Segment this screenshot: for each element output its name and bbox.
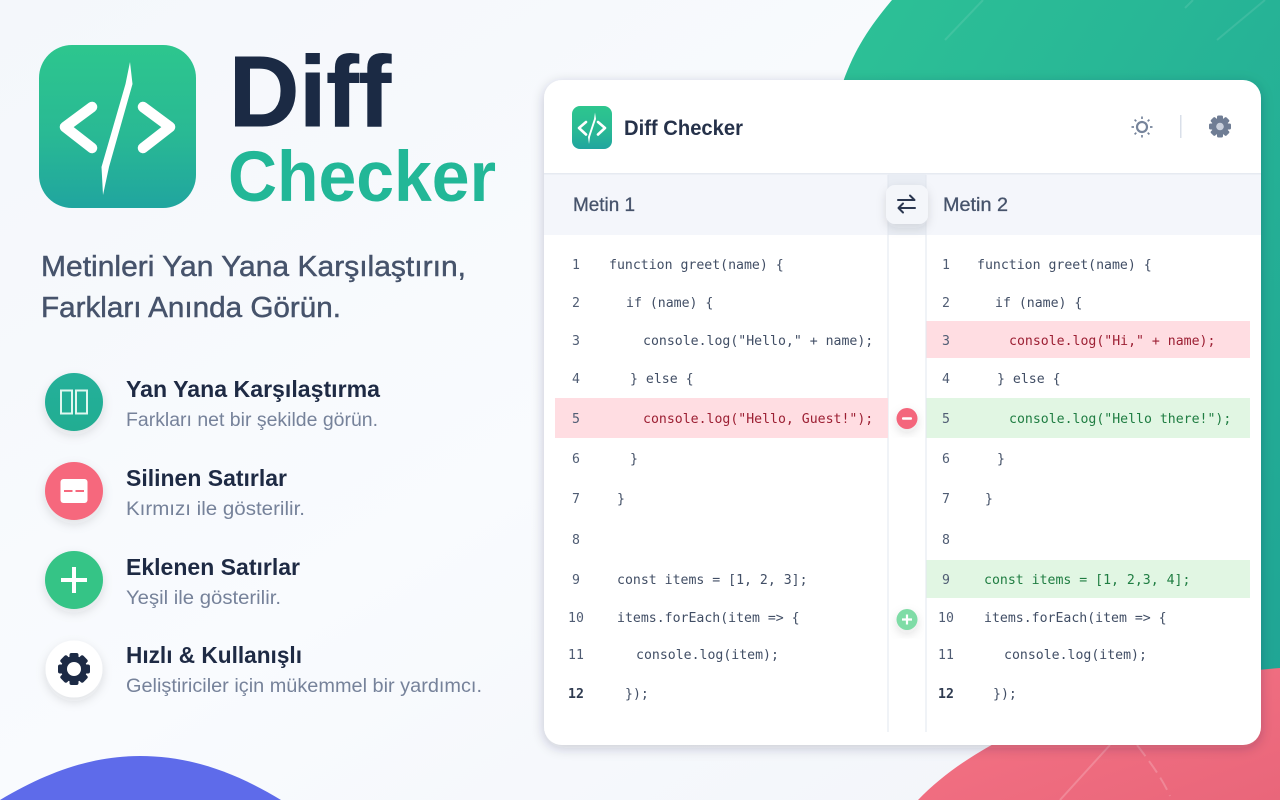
- icon: minus box: [45, 462, 103, 520]
- code: left column: 2: [572, 296, 580, 311]
- code: right column: const items = [1, 2,3, 4];: [984, 573, 1190, 588]
- feature description: Kırmızı ile gösterilir.: [126, 499, 305, 520]
- code: left column: console.log("Hello, Guest!");: [643, 412, 873, 427]
- divider: [1180, 115, 1182, 138]
- code: right column: items.forEach(item => {: [984, 611, 1167, 626]
- icon: plus: [45, 551, 103, 609]
- code: right column: }: [997, 452, 1005, 467]
- column header bar: [544, 173, 1261, 235]
- code: right column: 9: [942, 573, 950, 588]
- icon: app logo: [39, 45, 196, 208]
- background shape: green blob: [843, 0, 1280, 690]
- icon: settings gear: [1209, 116, 1231, 138]
- icon: sun: [1132, 116, 1152, 138]
- code: left column: 6: [572, 452, 580, 467]
- code: left column: 7: [572, 492, 580, 507]
- button: swap: [886, 185, 928, 224]
- code: left column: console.log("Hello," + name);: [643, 334, 873, 349]
- background shape: red blob: [918, 668, 1280, 800]
- badge: added: [896, 609, 918, 630]
- tagline: Metinleri Yan Yana Karşılaştırın,: [41, 251, 466, 283]
- code: right column: 8: [942, 533, 950, 548]
- title: Checker: Checker: [228, 138, 496, 217]
- code: right column: console.log("Hi," + name);: [1009, 334, 1215, 349]
- code: left column: }: [630, 452, 638, 467]
- code: right column: if (name) {: [995, 296, 1082, 311]
- code: right column: } else {: [997, 372, 1061, 387]
- feature: side by side: [45, 373, 380, 431]
- feature title: Eklenen Satırlar: [126, 554, 300, 580]
- feature: fast and handy: [46, 640, 482, 698]
- code: right column: }: [985, 492, 993, 507]
- code: left column: 12: [568, 687, 584, 702]
- icon: small logo: [572, 106, 612, 149]
- tagline: [41, 251, 466, 324]
- code: right column: 3: [942, 334, 950, 349]
- code: left column: const items = [1, 2, 3];: [617, 573, 808, 588]
- code: right column: 4: [942, 372, 950, 387]
- code: left column: 4: [572, 372, 580, 387]
- code: left column: items.forEach(item => {: [617, 611, 800, 626]
- feature description: Farkları net bir şekilde görün.: [126, 410, 378, 431]
- code: left column: function greet(name) {: [609, 258, 784, 273]
- feature: deleted lines: [45, 462, 305, 520]
- icon: columns: [45, 373, 103, 431]
- feature: added lines: [45, 551, 300, 609]
- icon: gear: [46, 640, 102, 698]
- code: right column: function greet(name) {: [977, 258, 1152, 273]
- code: right column: 5: [942, 412, 950, 427]
- code: right column: console.log(item);: [1004, 648, 1147, 663]
- code: right column: });: [993, 687, 1017, 702]
- feature description: Geliştiriciler için mükemmel bir yardımcı.: [126, 676, 482, 697]
- code: left column: }: [617, 492, 625, 507]
- code: right column: 2: [942, 296, 950, 311]
- gutter lines: [888, 175, 926, 732]
- feature description: Yeşil ile gösterilir.: [126, 588, 281, 609]
- code: left column: if (name) {: [626, 296, 713, 311]
- code: left column: 10: [568, 611, 584, 626]
- app name: Diff Checker: [624, 117, 743, 140]
- background shape: blue blob: [0, 756, 281, 800]
- code: right column: console.log("Hello there!");: [1009, 412, 1231, 427]
- code: right column: 6: [942, 452, 950, 467]
- code: right column: 11: [938, 648, 954, 663]
- column label: left: Metin 1: [573, 195, 635, 216]
- panel header: [572, 106, 1231, 149]
- column label: right: Metin 2: [943, 195, 1008, 216]
- code: right column: 10: [938, 611, 954, 626]
- code: left column: console.log(item);: [636, 648, 779, 663]
- code: left column: } else {: [630, 372, 694, 387]
- code: left column: 9: [572, 573, 580, 588]
- code: right column: [938, 258, 1231, 702]
- code: left column: 1: [572, 258, 580, 273]
- code: right column: 12: [938, 687, 954, 702]
- badge: removed: [896, 408, 918, 429]
- code: left column: 5: [572, 412, 580, 427]
- code: right column: 7: [942, 492, 950, 507]
- tagline: Farkları Anında Görün.: [41, 292, 341, 324]
- code: left column: });: [625, 687, 649, 702]
- panel: diff checker window: [544, 80, 1261, 745]
- code: left column: 8: [572, 533, 580, 548]
- code: right column: 1: [942, 258, 950, 273]
- highlighted rows: [555, 321, 1250, 598]
- code: left column: 11: [568, 648, 584, 663]
- code: left column: 3: [572, 334, 580, 349]
- feature title: Yan Yana Karşılaştırma: [126, 376, 380, 402]
- title: Diff: Diff: [229, 36, 392, 148]
- code: left column: [568, 258, 873, 702]
- feature title: Hızlı & Kullanışlı: [126, 642, 302, 668]
- feature title: Silinen Satırlar: [126, 465, 287, 491]
